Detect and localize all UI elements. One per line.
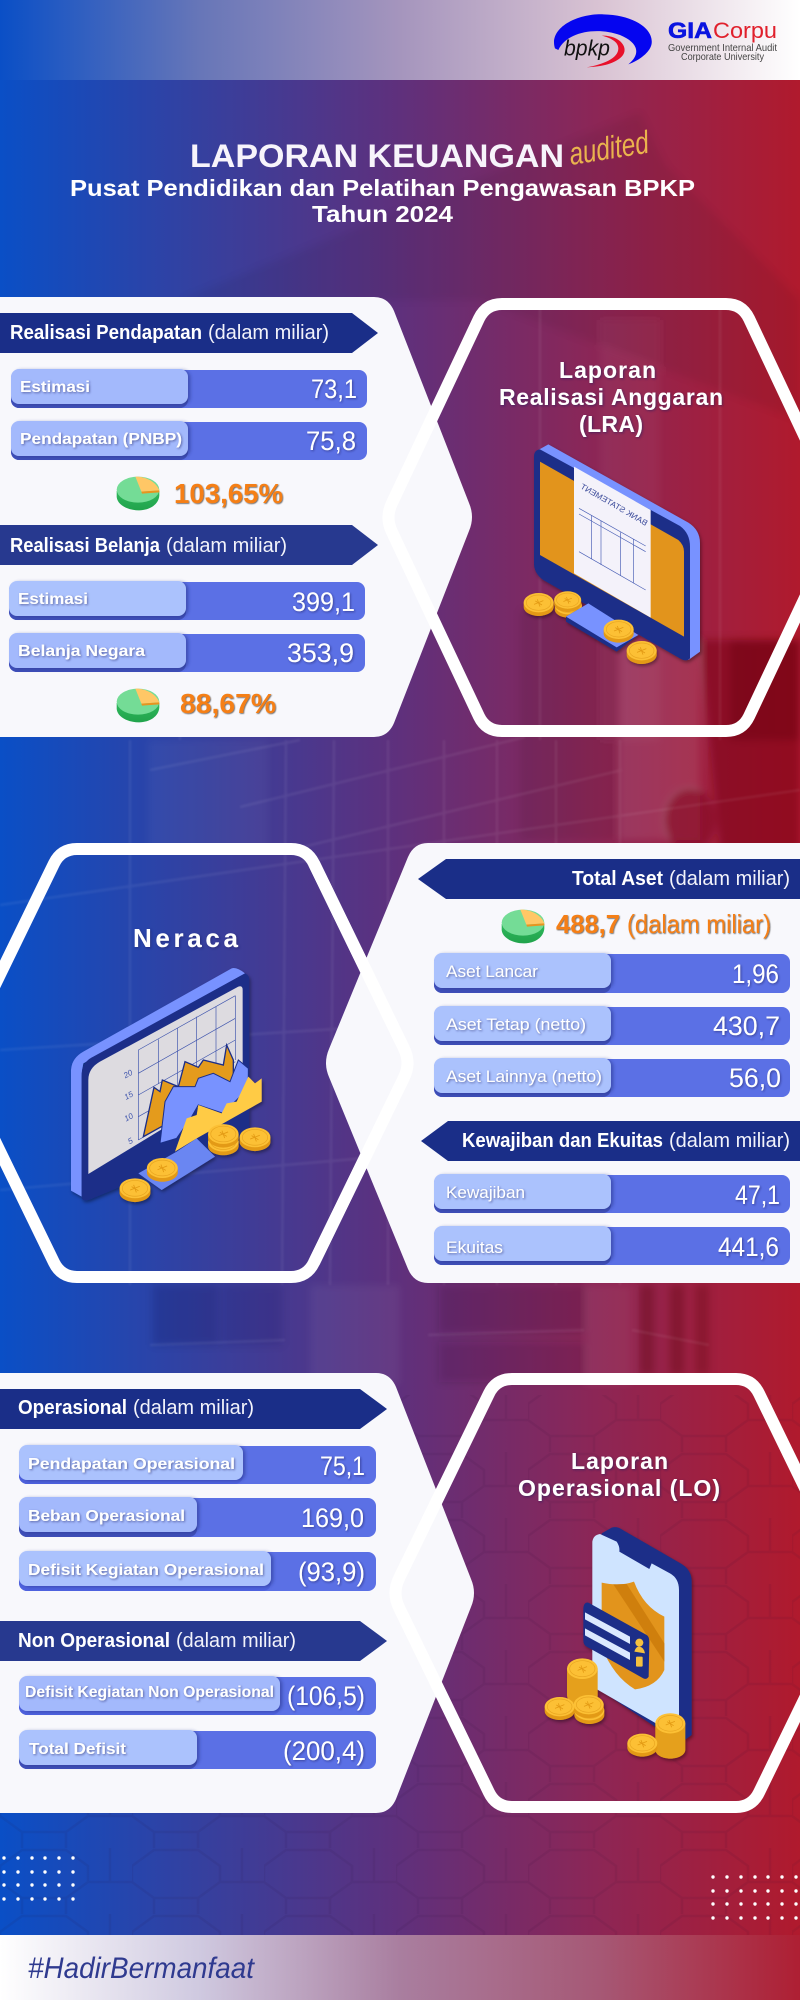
icon: monitor with area chart: 5 — [126, 1136, 135, 1146]
heading: realisasi pendapatan — [0, 313, 378, 353]
footer band — [0, 1935, 800, 2000]
bar: ekuitas: Ekuitas — [446, 1238, 503, 1257]
hashtag: #HadirBermanfaat — [28, 1952, 256, 1985]
hexagon frame: neraca — [0, 849, 408, 1277]
bar: pendapatan operasional: Pendapatan Operasional — [28, 1456, 235, 1473]
icon: monitor with bank statement — [524, 444, 700, 664]
bar: estimasi pendapatan: 73,1 — [311, 374, 357, 404]
bar: estimasi belanja: Estimasi — [18, 591, 88, 608]
heading: realisasi belanja — [0, 525, 378, 565]
panel: operasional data — [0, 1373, 474, 1813]
logo: GIA Corpu: Corpu — [713, 18, 777, 43]
panel: neraca data — [314, 843, 800, 1283]
bar: total defisit — [19, 1730, 376, 1769]
hexagon frame: LRA — [388, 304, 800, 731]
panel: realisasi LRA — [0, 297, 472, 737]
heading: operasional: Operasional — [18, 1397, 127, 1419]
top header band — [0, 0, 800, 80]
bar: estimasi pendapatan: Estimasi — [20, 379, 90, 396]
total aset value: (dalam miliar) — [627, 909, 771, 939]
bar: defisit kegiatan operasional — [19, 1551, 376, 1591]
icon: monitor with area chart — [71, 968, 270, 1202]
bar: defisit kegiatan non operasional: Defisit Kegiatan Non Operasional — [25, 1684, 274, 1701]
heading: operasional — [0, 1389, 387, 1429]
bar: aset tetap: 430,7 — [713, 1011, 780, 1041]
bar: beban operasional: 169,0 — [301, 1503, 364, 1533]
bar: defisit kegiatan non operasional — [19, 1676, 376, 1715]
title: audited — [566, 124, 652, 172]
bar: pendapatan PNBP: Pendapatan (PNBP) — [20, 431, 182, 448]
title: LAPORAN KEUANGAN — [190, 138, 564, 174]
heading: laporan realisasi anggaran — [499, 357, 723, 437]
heading: laporan realisasi anggaran: Realisasi Anggaran — [499, 384, 723, 410]
bar: estimasi belanja: 399,1 — [292, 587, 355, 617]
heading: realisasi pendapatan: Realisasi Pendapatan — [10, 322, 202, 344]
heading: laporan realisasi anggaran: Laporan — [559, 357, 656, 383]
heading: laporan operasional: Laporan — [571, 1448, 668, 1474]
logo: bpkp — [554, 14, 652, 67]
heading: non operasional: Non Operasional — [18, 1630, 170, 1652]
heading: realisasi pendapatan: (dalam miliar) — [208, 322, 329, 344]
percentage: 103,65%: 103,65% — [174, 478, 283, 509]
logo: GIA Corpu — [668, 18, 777, 63]
bar: total defisit: Total Defisit — [29, 1741, 127, 1758]
total aset value — [556, 909, 771, 939]
bar: pendapatan operasional — [19, 1445, 376, 1484]
bar: aset tetap — [434, 1006, 790, 1045]
heading: total aset: Total Aset — [572, 868, 663, 890]
percentage: 88,67%: 88,67% — [180, 688, 276, 719]
icon: monitor with area chart: 10 — [123, 1111, 135, 1123]
icon: pie chart — [117, 477, 159, 510]
heading: neraca: Neraca — [133, 923, 239, 953]
heading: kewajiban dan ekuitas: (dalam miliar) — [669, 1130, 790, 1152]
heading: total aset: (dalam miliar) — [669, 868, 790, 890]
bar: total defisit: (200,4) — [283, 1736, 365, 1766]
bar: ekuitas: 441,6 — [718, 1232, 779, 1262]
bar: aset lancar: 1,96 — [732, 959, 779, 989]
bar: estimasi pendapatan — [11, 369, 367, 408]
hexagon edge over panel — [314, 864, 408, 1262]
title: Tahun 2024 — [312, 201, 453, 227]
logo: GIA Corpu: Government Internal Audit — [668, 42, 777, 54]
bar: defisit kegiatan operasional: Defisit Kegiatan Operasional — [28, 1562, 264, 1579]
bar: estimasi belanja — [9, 581, 365, 620]
bar: pendapatan PNBP — [11, 421, 367, 460]
icon: smartphone with shield and card — [545, 1527, 692, 1759]
bar: defisit kegiatan operasional: (93,9) — [298, 1557, 365, 1587]
bar: aset lainnya: Aset Lainnya (netto) — [446, 1067, 602, 1086]
icon: monitor with bank statement: BANK STATEMENT — [579, 482, 649, 528]
heading: non operasional: (dalam miliar) — [176, 1630, 296, 1652]
heading: laporan operasional — [518, 1448, 720, 1501]
heading: kewajiban dan ekuitas — [421, 1121, 800, 1161]
bar: belanja negara: Belanja Negara — [18, 643, 145, 660]
logo: GIA Corpu: Corporate University — [681, 51, 765, 63]
bar: pendapatan operasional: 75,1 — [320, 1451, 365, 1481]
logo: GIA Corpu: GIA — [668, 18, 712, 43]
bar: pendapatan PNBP: 75,8 — [306, 426, 356, 456]
bar: aset lancar — [434, 953, 790, 993]
icon: pie chart — [117, 689, 159, 722]
hexagon frame: LO — [396, 1379, 800, 1807]
heading: realisasi belanja: Realisasi Belanja — [10, 535, 161, 557]
logo: bpkp: bpkp — [564, 36, 610, 61]
heading: operasional: (dalam miliar) — [133, 1397, 254, 1419]
icon: monitor with area chart: 20 — [121, 1068, 135, 1081]
bar: aset tetap: Aset Tetap (netto) — [446, 1015, 586, 1034]
bar: ekuitas — [434, 1226, 790, 1265]
bar: kewajiban: Kewajiban — [446, 1183, 525, 1202]
title: Pusat Pendidikan dan Pelatihan Pengawasan BPKP — [70, 175, 695, 201]
heading: realisasi belanja: (dalam miliar) — [166, 535, 287, 557]
bar: aset lancar: Aset Lancar — [446, 962, 538, 981]
bar: kewajiban: 47,1 — [735, 1180, 780, 1210]
bar: belanja negara: 353,9 — [287, 638, 354, 668]
bar: beban operasional: Beban Operasional — [28, 1508, 185, 1525]
title — [70, 124, 695, 227]
decoration: dot grid left — [2, 1856, 75, 1901]
bar: defisit kegiatan non operasional: (106,5) — [287, 1681, 365, 1711]
bar: aset lainnya — [434, 1058, 790, 1097]
heading: total aset — [418, 859, 800, 899]
heading: kewajiban dan ekuitas: Kewajiban dan Ekuitas — [462, 1130, 663, 1152]
total aset value: 488,7 — [556, 909, 620, 939]
decoration: dot grid right — [711, 1875, 798, 1920]
icon: monitor with area chart: 15 — [123, 1089, 135, 1102]
bar: aset lainnya: 56,0 — [729, 1063, 781, 1093]
bar: beban operasional — [19, 1497, 376, 1537]
heading: laporan realisasi anggaran: (LRA) — [579, 411, 643, 437]
bar: belanja negara — [9, 633, 365, 672]
bar: kewajiban — [434, 1174, 790, 1213]
heading: laporan operasional: Operasional (LO) — [518, 1475, 720, 1501]
heading: non operasional — [0, 1621, 387, 1661]
icon: pie chart — [502, 910, 544, 943]
